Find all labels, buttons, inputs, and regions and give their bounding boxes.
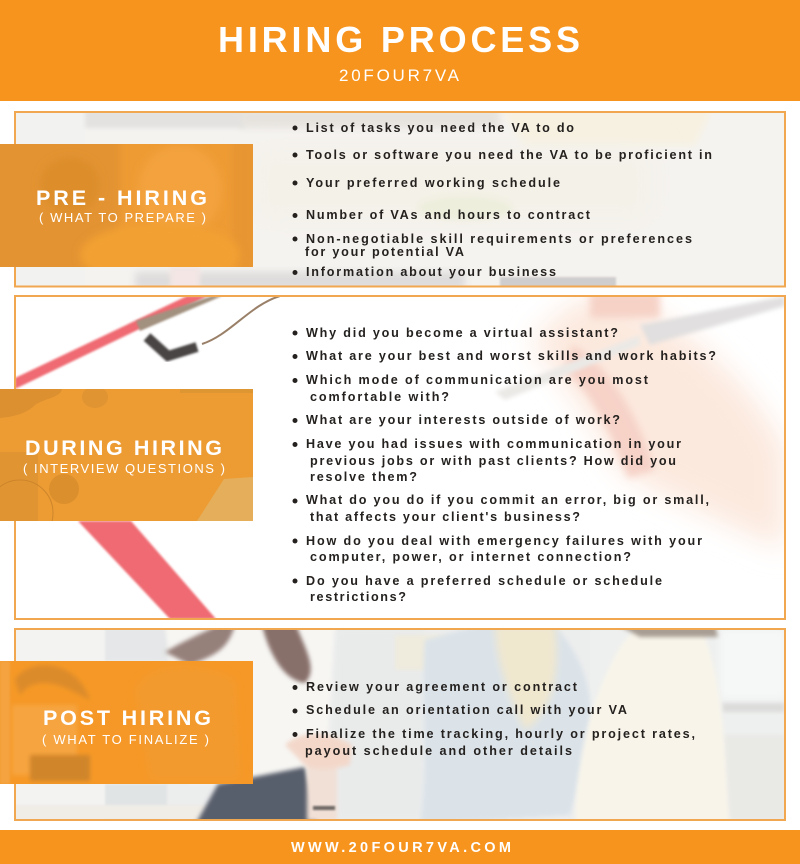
bullet list: post hiring <box>292 680 695 758</box>
bullet list: interview questions: What are your interests outside of work? <box>306 413 620 427</box>
bullet list: interview questions: Do you have a preferred schedule or schedule <box>306 574 662 588</box>
bullet list: pre-hiring: Your preferred working schedule <box>306 176 560 190</box>
panel background photo: desk <box>15 108 785 290</box>
bullet list: interview questions: resolve them? <box>310 470 417 484</box>
website url: WWW.20FOUR7VA.COM <box>291 840 511 856</box>
bullet list: interview questions: What do you do if you commit an error, big or small, <box>306 493 709 507</box>
bullet list: post hiring: payout schedule and other details <box>305 744 572 758</box>
bullet list: post hiring: Review your agreement or contract <box>306 680 578 694</box>
subheading: ( WHAT TO FINALIZE ) <box>42 732 209 747</box>
bullet list: pre-hiring: Information about your business <box>306 265 556 279</box>
panel: pre-hiring <box>0 108 785 290</box>
bullet list: pre-hiring: List of tasks you need the VA to do <box>306 121 574 135</box>
heading: PRE - HIRING <box>36 186 207 210</box>
subheading: ( INTERVIEW QUESTIONS ) <box>23 461 225 476</box>
bullet list: interview questions: Have you had issues with communication in your <box>306 437 681 451</box>
bullet list: interview questions: comfortable with? <box>310 390 449 404</box>
bullet list: pre-hiring: Non-negotiable skill requirements or preferences <box>306 232 692 246</box>
title: HIRING PROCESS <box>218 19 580 60</box>
panel: during hiring <box>0 292 785 619</box>
label box: during hiring <box>0 389 253 521</box>
bullet list: pre-hiring: for your potential VA <box>305 245 464 259</box>
bullet list: interview questions: Why did you become a virtual assistant? <box>306 326 618 340</box>
bullet list: pre-hiring: Tools or software you need the VA to be proficient in <box>306 148 712 162</box>
header banner <box>0 0 800 101</box>
bullet list: post hiring: Schedule an orientation call with your VA <box>306 703 627 717</box>
label box: post hiring <box>0 661 253 784</box>
bullet list: interview questions <box>292 326 716 604</box>
bullet list: interview questions: Which mode of communication are you most <box>306 373 649 387</box>
bullet list: pre-hiring <box>292 121 712 279</box>
bullet list: post hiring: Finalize the time tracking, hourly or project rates, <box>306 727 695 741</box>
bullet list: interview questions: How do you deal with emergency failures with your <box>306 534 702 548</box>
bullet list: interview questions: previous jobs or with past clients? How did you <box>310 454 676 468</box>
bullet list: interview questions: restrictions? <box>310 590 406 604</box>
panel background photo: handshake in office <box>15 625 785 825</box>
panel: post hiring <box>0 625 785 825</box>
bullet list: pre-hiring: Number of VAs and hours to contract <box>306 208 591 222</box>
heading: POST HIRING <box>43 706 211 730</box>
bullet list: interview questions: What are your best and worst skills and work habits? <box>306 349 716 363</box>
panel background photo: clipboard and pen <box>15 292 785 619</box>
subtitle: 20FOUR7VA <box>339 66 460 85</box>
subheading: ( WHAT TO PREPARE ) <box>39 210 206 225</box>
heading: DURING HIRING <box>25 436 222 460</box>
footer banner <box>0 830 800 864</box>
bullet list: interview questions: computer, power, or internet connection? <box>310 550 631 564</box>
label box: pre-hiring <box>0 144 253 267</box>
bullet list: interview questions: that affects your client's business? <box>310 510 580 524</box>
